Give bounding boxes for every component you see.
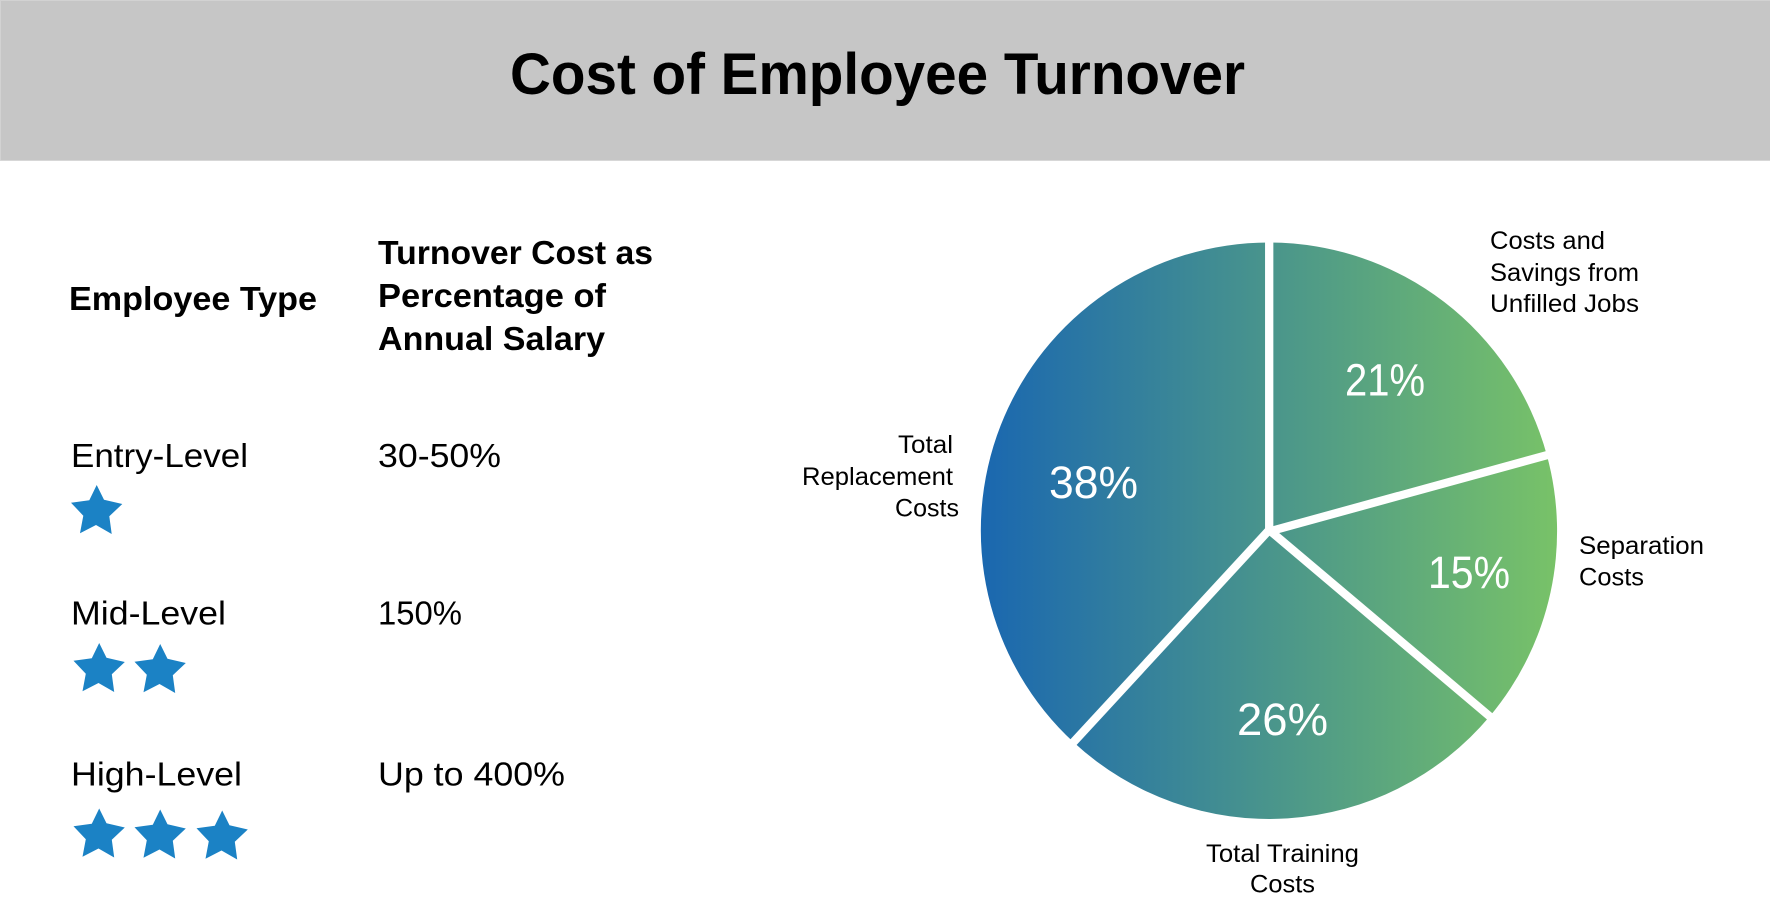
- header band: [0, 0, 1770, 161]
- icon: two stars: [74, 643, 186, 693]
- label: total replacement costs: [802, 431, 959, 522]
- row: high-level: Up to 400%: [378, 756, 565, 792]
- label: costs and savings from unfilled jobs: Costs and: [1490, 227, 1605, 255]
- row: high-level: High-Level: [71, 756, 242, 792]
- row: entry-level: Entry-Level: [71, 437, 248, 474]
- label: separation costs: Separation: [1579, 532, 1704, 560]
- label: costs and savings from unfilled jobs: [1490, 227, 1639, 318]
- value: 15%: 15%: [1428, 547, 1510, 598]
- value: 21%: 21%: [1345, 354, 1425, 406]
- row: high-level: [71, 756, 565, 860]
- slice: costs and savings from unfilled jobs 21%: [1270, 242, 1547, 530]
- row: entry-level: [71, 437, 501, 534]
- row: mid-level: [71, 594, 462, 693]
- label: separation costs: [1579, 532, 1704, 592]
- title: Cost of Employee Turnover: [510, 42, 1245, 107]
- label: separation costs: Costs: [1579, 564, 1644, 592]
- label: total training costs: [1206, 840, 1359, 898]
- icon: one star: [71, 485, 122, 534]
- label: total replacement costs: Costs: [895, 494, 959, 522]
- slice: total training costs 26%: [1074, 530, 1490, 819]
- slice: total replacement costs 38%: [981, 242, 1270, 743]
- label: total replacement costs: Replacement: [802, 463, 953, 491]
- row: mid-level: Mid-Level: [71, 594, 226, 632]
- label: costs and savings from unfilled jobs: Savings from: [1490, 259, 1639, 287]
- heading: turnover cost as percentage of annual salary: Percentage of: [378, 277, 607, 314]
- heading: turnover cost as percentage of annual salary: Turnover Cost as: [378, 234, 653, 271]
- row: mid-level: 150%: [378, 594, 462, 632]
- slice: separation costs 15%: [1270, 455, 1557, 716]
- label: costs and savings from unfilled jobs: Unfilled Jobs: [1490, 290, 1639, 318]
- row: entry-level: 30-50%: [378, 437, 501, 474]
- label: total replacement costs: Total: [898, 431, 953, 459]
- label: total training costs: Total Training: [1206, 840, 1359, 868]
- value: 38%: 38%: [1049, 457, 1138, 508]
- icon: three stars: [74, 808, 248, 860]
- label: total training costs: Costs: [1250, 870, 1315, 898]
- heading: turnover cost as percentage of annual salary: [378, 234, 653, 357]
- value: 26%: 26%: [1237, 694, 1328, 745]
- pie chart: cost breakdown: [981, 236, 1557, 819]
- panel: employee type table: [69, 234, 653, 860]
- heading: turnover cost as percentage of annual salary: Annual Salary: [378, 320, 606, 357]
- heading: employee type: Employee Type: [69, 280, 317, 317]
